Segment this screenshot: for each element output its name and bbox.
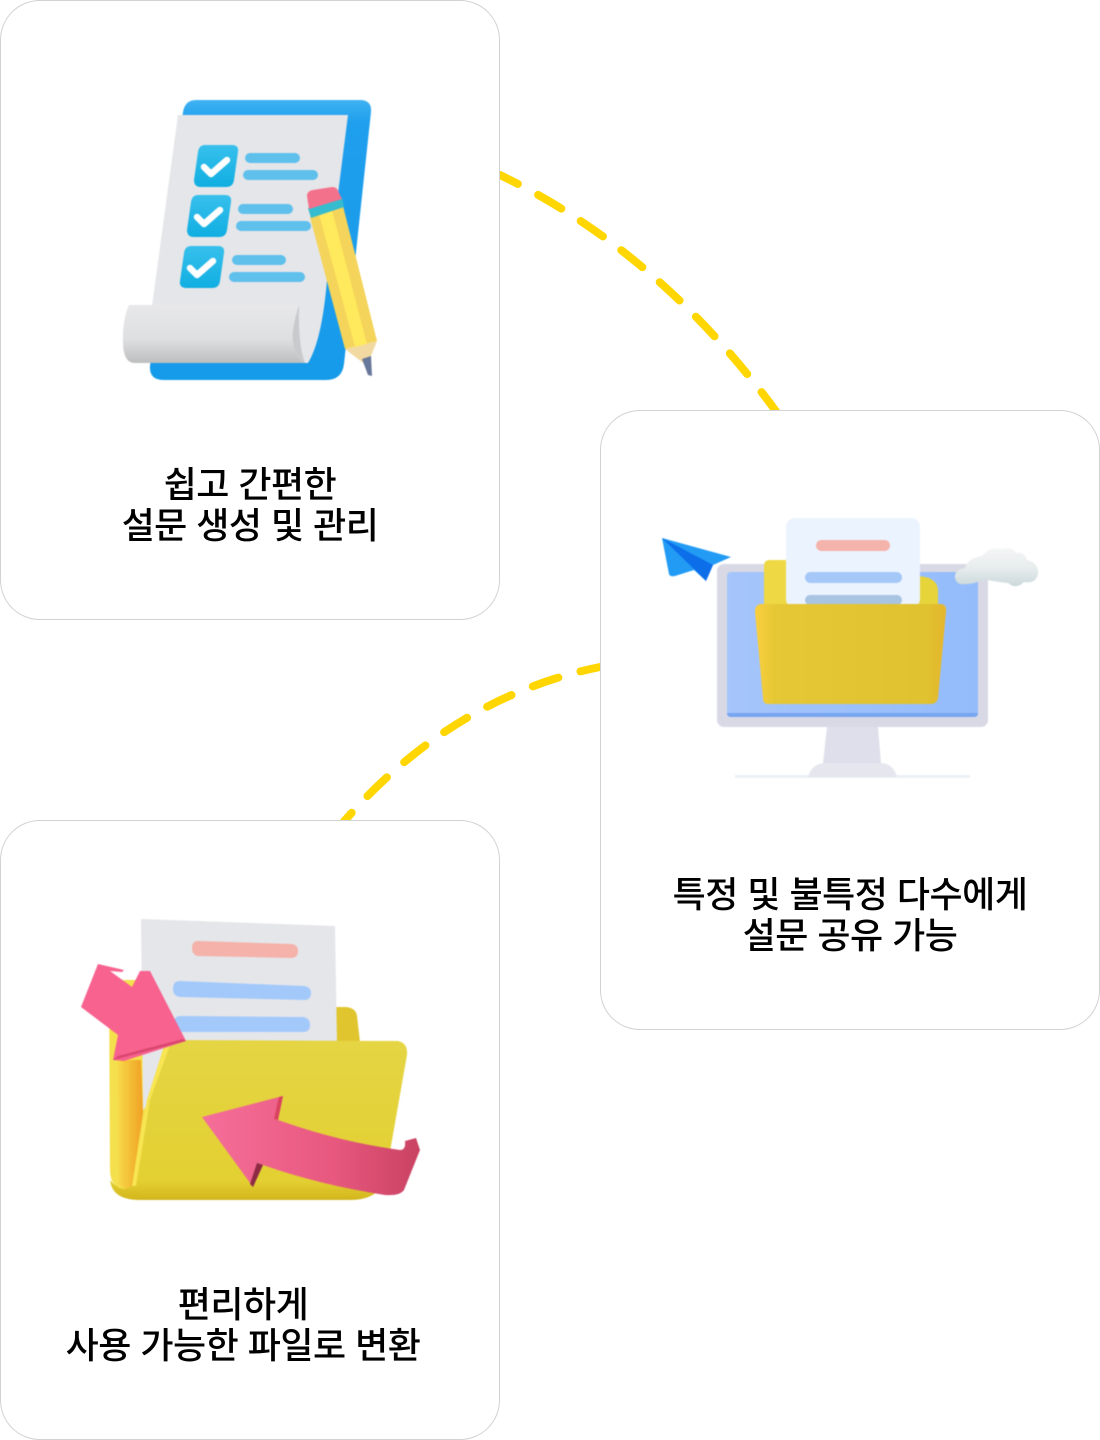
label text: 사용 가능한 파일로 변환 [66,1325,420,1366]
label text: 설문 공유 가능 [743,915,957,956]
panel: file conversion [0,820,500,1440]
label text [66,1284,420,1366]
panel: sharing [600,410,1100,1030]
label text: 특정 및 불특정 다수에게 [673,874,1027,915]
icon: checklist with pencil [122,99,378,381]
icon: folder with arrows [80,919,421,1201]
label text: 쉽고 간편한 [164,464,336,505]
icon: monitor with folder [661,518,1038,778]
label text: 설문 생성 및 관리 [122,505,378,546]
label text: 편리하게 [178,1284,308,1325]
panel: easy survey creation [0,0,500,620]
label text [673,874,1027,956]
label text [122,464,378,546]
